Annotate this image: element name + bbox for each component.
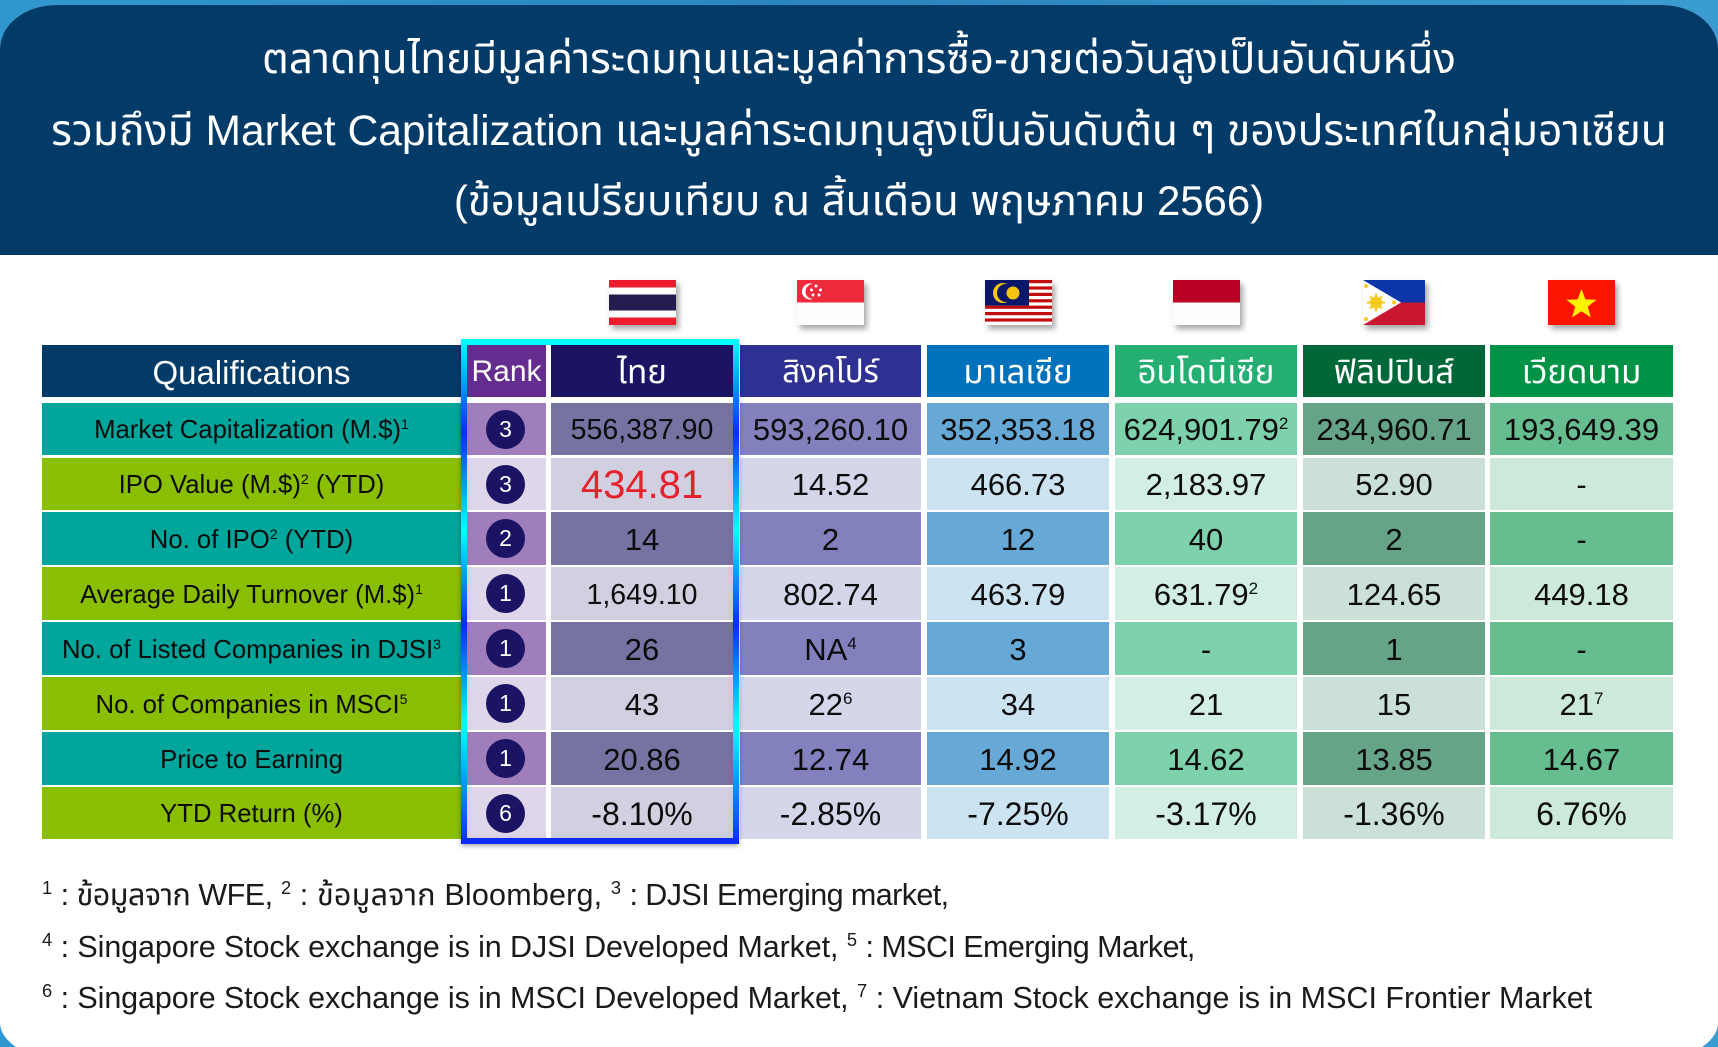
Indonesia bbox=[1115, 567, 1297, 620]
Malaysia bbox=[927, 622, 1109, 675]
label bbox=[42, 567, 461, 620]
row: Price to Earning bbox=[42, 732, 1673, 785]
rank badge: 1 bbox=[499, 580, 512, 606]
Indonesia: 631.792 bbox=[1154, 576, 1258, 612]
flag: Vietnam bbox=[1548, 280, 1622, 332]
row: No. of Companies in MSCI bbox=[42, 677, 1673, 730]
rank cell bbox=[467, 458, 546, 510]
Vietnam bbox=[1490, 567, 1673, 620]
Vietnam: - bbox=[1576, 467, 1587, 502]
rank badge: 3 bbox=[499, 416, 512, 442]
Malaysia: 14.92 bbox=[979, 742, 1057, 776]
label: No. of IPO2 (YTD) bbox=[150, 526, 353, 554]
Malaysia: 352,353.18 bbox=[940, 412, 1096, 447]
header: Thailand bbox=[551, 345, 733, 397]
Indonesia bbox=[1115, 512, 1297, 565]
Vietnam bbox=[1490, 787, 1673, 839]
rank badge bbox=[486, 410, 525, 449]
Vietnam: - bbox=[1576, 632, 1587, 666]
Philippines bbox=[1303, 458, 1485, 510]
Singapore: NA4 bbox=[804, 632, 857, 666]
row: Average Daily Turnover bbox=[42, 567, 1673, 620]
Thailand: 43 bbox=[625, 686, 659, 722]
title banner bbox=[0, 5, 1718, 255]
label: IPO Value (M.$)2 (YTD) bbox=[119, 471, 384, 499]
Singapore bbox=[740, 458, 921, 510]
flag: Indonesia bbox=[1172, 280, 1246, 332]
Philippines: 1 bbox=[1385, 632, 1403, 666]
label bbox=[42, 677, 461, 730]
flag: Philippines bbox=[1362, 280, 1432, 332]
header: Qualifications bbox=[42, 345, 461, 397]
Vietnam bbox=[1490, 677, 1673, 730]
Thailand bbox=[551, 732, 733, 785]
Malaysia bbox=[927, 567, 1109, 620]
Singapore bbox=[740, 677, 921, 730]
Thailand bbox=[551, 787, 733, 839]
header: Philippines: ฟิลิปปินส์ bbox=[1334, 353, 1454, 390]
label: Market Capitalization (M.$)1 bbox=[94, 416, 409, 444]
header: Qualifications: Qualifications bbox=[152, 354, 351, 390]
footnote line 2: 4 : Singapore Stock exchange is in DJSI Developed Market, 5 : MSCI Emerging Market, bbox=[42, 929, 1195, 964]
flag: Thailand bbox=[608, 280, 682, 332]
Philippines bbox=[1303, 512, 1485, 565]
rank badge: 6 bbox=[499, 800, 512, 826]
Thailand: 1,649.10 bbox=[587, 578, 697, 610]
rank cell bbox=[467, 403, 546, 455]
Indonesia: 14.62 bbox=[1167, 742, 1245, 776]
Singapore bbox=[740, 403, 921, 455]
Singapore: 14.52 bbox=[792, 467, 869, 502]
Philippines: 2 bbox=[1385, 522, 1403, 556]
label bbox=[42, 622, 461, 675]
rank badge bbox=[486, 684, 525, 723]
rank badge bbox=[486, 739, 525, 778]
Malaysia: 466.73 bbox=[971, 467, 1065, 502]
Vietnam bbox=[1490, 403, 1673, 455]
Philippines: 234,960.71 bbox=[1316, 412, 1472, 447]
label bbox=[42, 403, 461, 455]
Vietnam: - bbox=[1576, 522, 1587, 556]
Thailand: 26 bbox=[625, 632, 659, 666]
title line 1: ตลาดทุนไทยมีมูลค่าระดมทุนและมูลค่าการซื้อ-ขายต่อวันสูงเป็นอันดับหนึ่ง bbox=[262, 35, 1456, 82]
header: Malaysia bbox=[927, 345, 1109, 397]
Thailand highlighted value bbox=[551, 458, 733, 510]
Malaysia bbox=[927, 512, 1109, 565]
rank badge bbox=[486, 465, 525, 504]
Thailand: 20.86 bbox=[603, 742, 681, 776]
rank cell bbox=[467, 732, 546, 785]
Vietnam: 193,649.39 bbox=[1504, 412, 1659, 447]
Vietnam bbox=[1490, 458, 1673, 510]
rank badge: 3 bbox=[499, 471, 512, 497]
Vietnam: 217 bbox=[1560, 686, 1603, 722]
header: Indonesia bbox=[1115, 345, 1297, 397]
Philippines: 15 bbox=[1377, 686, 1411, 722]
Vietnam bbox=[1490, 512, 1673, 565]
Thailand: -8.10% bbox=[591, 796, 693, 832]
rank cell bbox=[467, 677, 546, 730]
Malaysia bbox=[927, 787, 1109, 839]
rank cell bbox=[467, 512, 546, 565]
Thailand: 14 bbox=[625, 522, 659, 556]
Malaysia bbox=[927, 403, 1109, 455]
flag: Malaysia bbox=[984, 280, 1058, 332]
Malaysia: 12 bbox=[1001, 522, 1035, 556]
Singapore bbox=[740, 512, 921, 565]
label: No. of Companies in MSCI5 bbox=[96, 690, 407, 718]
Thailand bbox=[551, 677, 733, 730]
label: Average Daily Turnover (M.$)1 bbox=[80, 580, 423, 608]
Indonesia bbox=[1115, 732, 1297, 785]
Singapore: -2.85% bbox=[780, 796, 881, 832]
Indonesia: 624,901.792 bbox=[1124, 412, 1288, 447]
Indonesia: -3.17% bbox=[1155, 796, 1257, 832]
Philippines bbox=[1303, 677, 1485, 730]
Malaysia: 34 bbox=[1001, 686, 1035, 722]
label bbox=[42, 732, 461, 785]
rank cell bbox=[467, 787, 546, 839]
header: Vietnam: เวียดนาม bbox=[1522, 353, 1641, 390]
Thailand bbox=[551, 512, 733, 565]
rank cell bbox=[467, 567, 546, 620]
rank badge bbox=[486, 519, 525, 558]
label: YTD Return (%) bbox=[160, 800, 343, 828]
header: Philippines bbox=[1303, 345, 1485, 397]
header: Thailand: ไทย bbox=[617, 353, 667, 390]
Indonesia: 2,183.97 bbox=[1146, 467, 1266, 502]
header: Rank bbox=[467, 345, 546, 397]
label: No. of Listed Companies in DJSI3 bbox=[62, 636, 441, 664]
row: Market Capitalization bbox=[42, 403, 1673, 455]
Indonesia bbox=[1115, 787, 1297, 839]
Thailand bbox=[551, 403, 733, 455]
rank badge: 1 bbox=[499, 635, 512, 661]
highlight frame around Thailand column bbox=[461, 339, 739, 844]
Vietnam: 449.18 bbox=[1534, 576, 1629, 612]
Thailand: 556,387.90 bbox=[571, 414, 713, 446]
Philippines bbox=[1303, 403, 1485, 455]
header: Vietnam bbox=[1490, 345, 1673, 397]
rank cell bbox=[467, 622, 546, 675]
Singapore bbox=[740, 622, 921, 675]
rank badge bbox=[486, 794, 525, 833]
Philippines: 124.65 bbox=[1347, 576, 1441, 612]
Indonesia bbox=[1115, 677, 1297, 730]
footnote line 1: 1 : ข้อมูลจาก WFE, 2 : ข้อมูลจาก Bloomberg, 3 : DJSI Emerging market, bbox=[42, 877, 949, 912]
Philippines bbox=[1303, 732, 1485, 785]
Malaysia bbox=[927, 458, 1109, 510]
Philippines: -1.36% bbox=[1343, 796, 1445, 832]
rank badge: 1 bbox=[499, 745, 512, 771]
label: Price to Earning bbox=[160, 746, 343, 774]
Thailand bbox=[551, 567, 733, 620]
row: YTD Return bbox=[42, 787, 1673, 839]
Thailand highlighted value: 434.81 bbox=[581, 463, 703, 507]
Vietnam: 14.67 bbox=[1543, 742, 1620, 776]
Vietnam: 6.76% bbox=[1536, 796, 1627, 832]
label bbox=[42, 458, 461, 510]
Singapore bbox=[740, 732, 921, 785]
header: Singapore: สิงคโปร์ bbox=[782, 354, 879, 389]
rank badge: 2 bbox=[499, 525, 512, 551]
label bbox=[42, 512, 461, 565]
Singapore: 226 bbox=[809, 686, 852, 722]
row: No. of Listed Companies in DJSI bbox=[42, 622, 1673, 675]
rank badge bbox=[486, 574, 525, 613]
Indonesia bbox=[1115, 622, 1297, 675]
Malaysia: 3 bbox=[1009, 632, 1027, 666]
Malaysia: -7.25% bbox=[967, 796, 1069, 832]
rank badge: 1 bbox=[499, 690, 512, 716]
Indonesia: - bbox=[1201, 632, 1211, 666]
header row bbox=[42, 345, 1673, 397]
row: No. of IPO bbox=[42, 512, 1673, 565]
Indonesia bbox=[1115, 458, 1297, 510]
Singapore: 2 bbox=[822, 522, 839, 556]
Malaysia bbox=[927, 677, 1109, 730]
title line 2: รวมถึงมี Market Capitalization และมูลค่าระดมทุนสูงเป็นอันดับต้น ๆ ของประเทศในกลุ่มอาเซียน bbox=[51, 107, 1667, 155]
Philippines bbox=[1303, 567, 1485, 620]
Indonesia bbox=[1115, 403, 1297, 455]
Singapore: 593,260.10 bbox=[753, 412, 908, 447]
Singapore: 802.74 bbox=[783, 576, 878, 612]
Philippines bbox=[1303, 622, 1485, 675]
footnote line 3: 6 : Singapore Stock exchange is in MSCI Developed Market, 7 : Vietnam Stock exchange is in MSCI Frontier Market bbox=[42, 980, 1592, 1015]
flag: Singapore bbox=[796, 280, 870, 332]
row: IPO Value bbox=[42, 458, 1673, 510]
Indonesia: 21 bbox=[1189, 686, 1223, 722]
header: Rank: Rank bbox=[471, 355, 542, 388]
label bbox=[42, 787, 461, 839]
Thailand bbox=[551, 622, 733, 675]
header: Malaysia: มาเลเซีย bbox=[963, 353, 1073, 390]
Singapore bbox=[740, 787, 921, 839]
header: Singapore bbox=[740, 345, 921, 397]
rank badge bbox=[486, 629, 525, 668]
Malaysia: 463.79 bbox=[971, 576, 1065, 612]
Vietnam bbox=[1490, 622, 1673, 675]
Philippines: 13.85 bbox=[1355, 742, 1433, 776]
Philippines bbox=[1303, 787, 1485, 839]
Malaysia bbox=[927, 732, 1109, 785]
Philippines: 52.90 bbox=[1355, 467, 1433, 502]
Indonesia: 40 bbox=[1189, 522, 1223, 556]
header: Indonesia: อินโดนีเซีย bbox=[1138, 353, 1274, 390]
Singapore: 12.74 bbox=[792, 742, 869, 776]
Singapore bbox=[740, 567, 921, 620]
title line 3: (ข้อมูลเปรียบเทียบ ณ สิ้นเดือน พฤษภาคม 2566) bbox=[454, 177, 1264, 224]
Vietnam bbox=[1490, 732, 1673, 785]
